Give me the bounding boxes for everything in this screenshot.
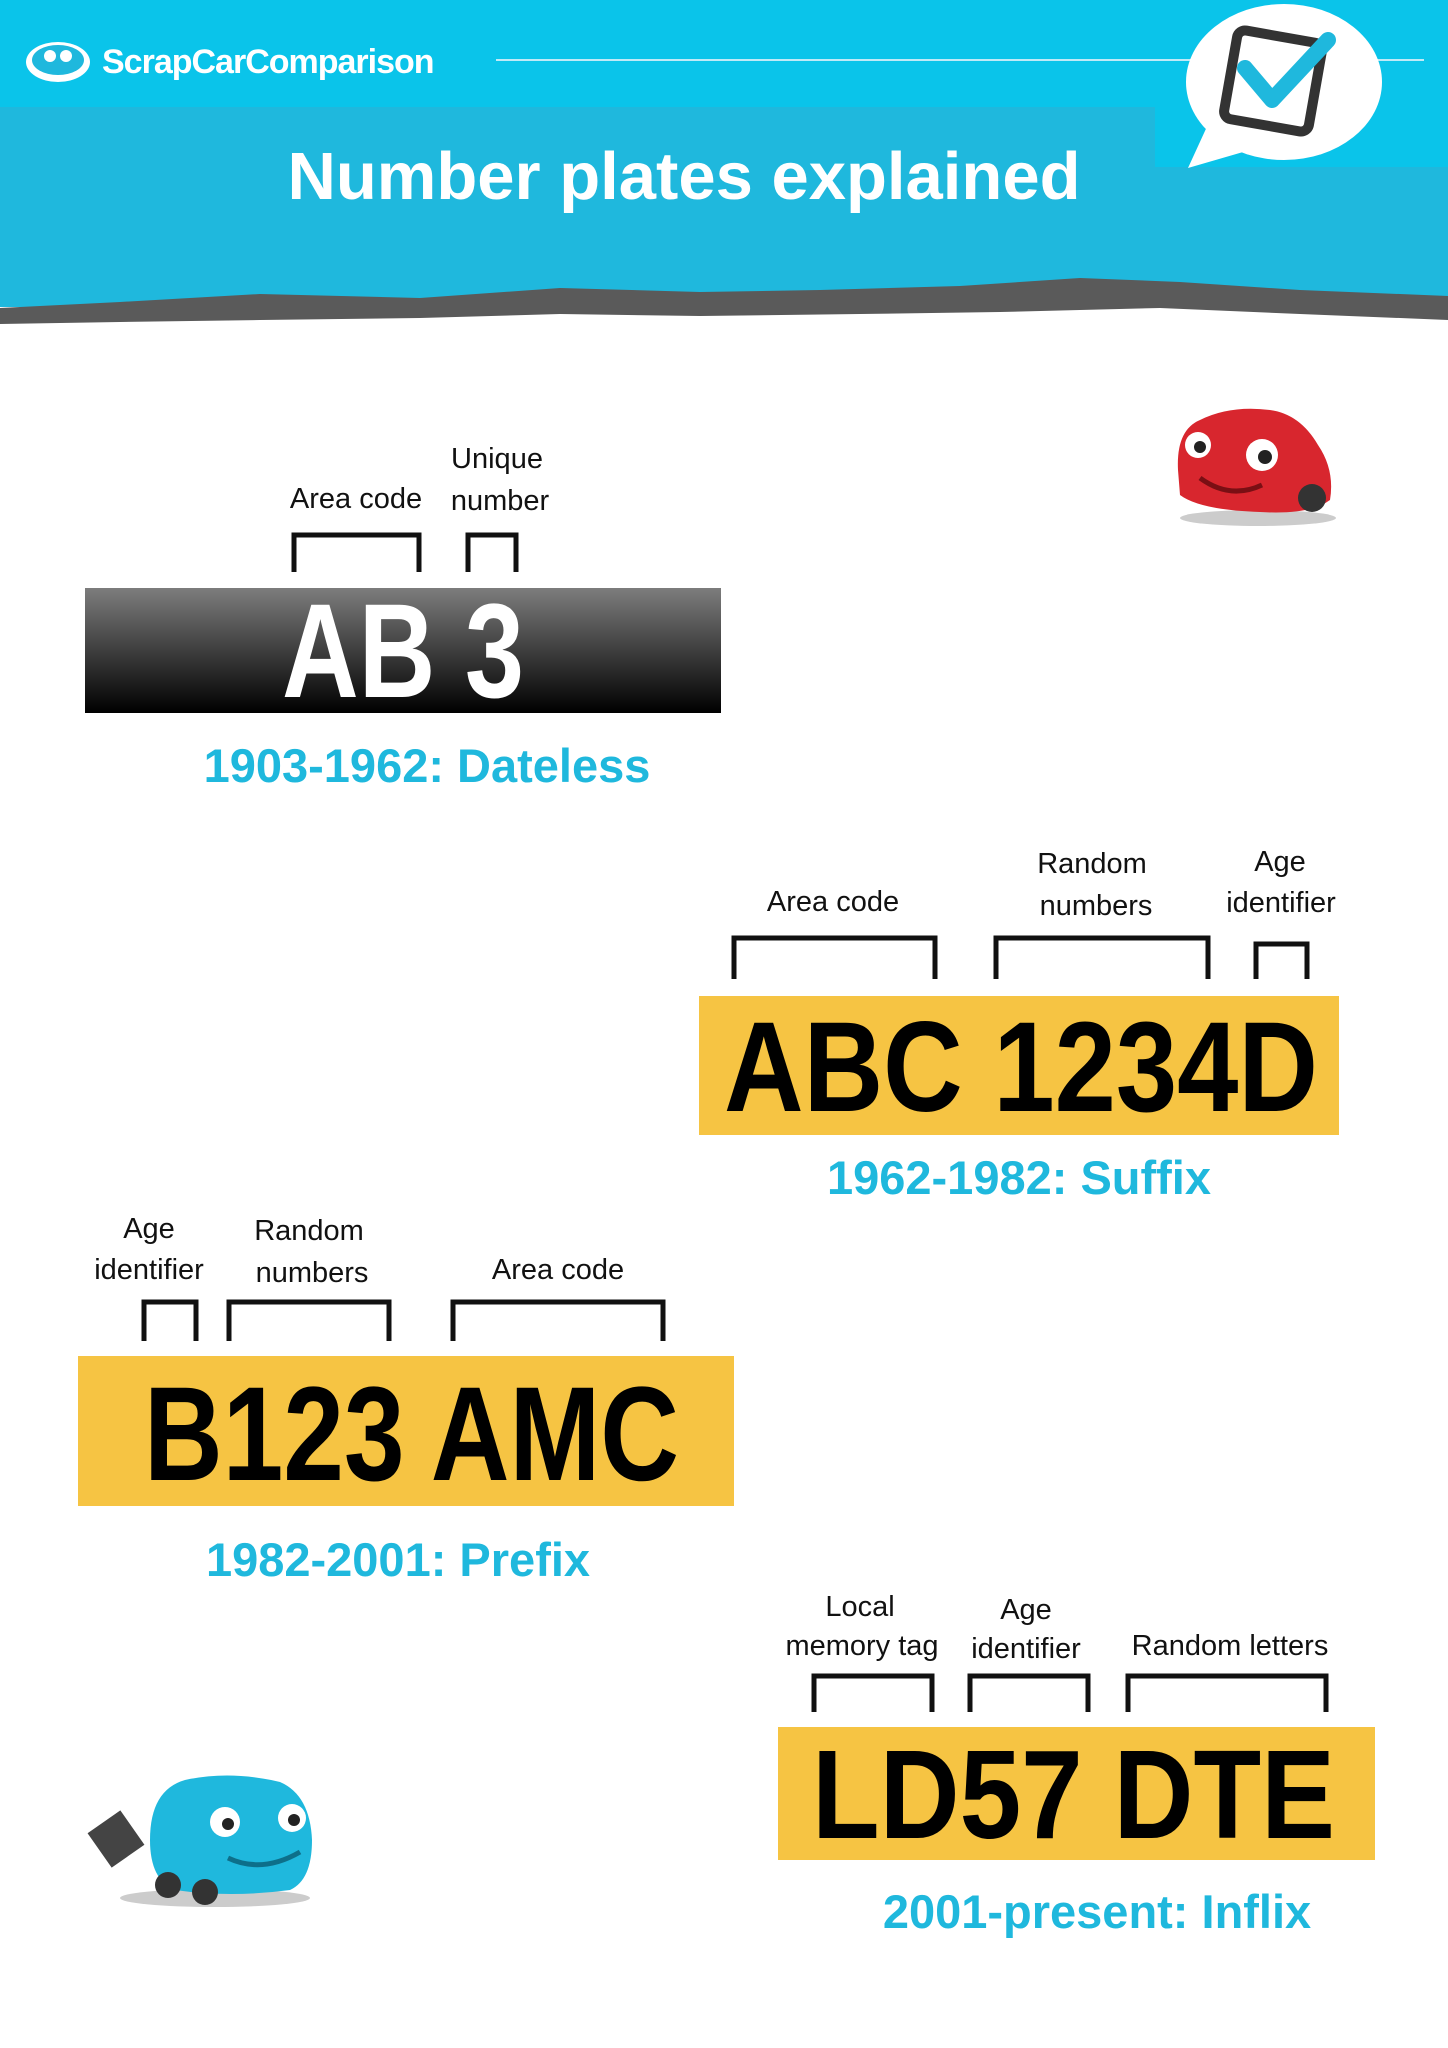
labels inflix: Random letters bbox=[1132, 1630, 1328, 1662]
labels prefix: Area code bbox=[492, 1254, 624, 1286]
labels inflix: Local bbox=[825, 1591, 895, 1623]
labels inflix bbox=[785, 1591, 1328, 1665]
labels suffix bbox=[767, 846, 1336, 922]
header bbox=[0, 0, 1448, 324]
title: Number plates explained bbox=[287, 139, 1081, 214]
caption dateless: 1903-1962: Dateless bbox=[204, 739, 650, 792]
panel: dateless bbox=[85, 443, 721, 792]
labels suffix: identifier bbox=[1226, 887, 1336, 919]
labels suffix: Age bbox=[1254, 846, 1306, 878]
brackets dateless bbox=[294, 535, 516, 572]
caption inflix: 2001-present: Inflix bbox=[883, 1885, 1311, 1938]
plate: AB 3: AB 3 bbox=[282, 577, 524, 726]
icon: red car bbox=[1178, 409, 1336, 526]
labels suffix: numbers bbox=[1040, 890, 1152, 922]
plate: LD57 DTE: LD57 DTE bbox=[812, 1724, 1335, 1865]
panel: inflix bbox=[778, 1591, 1375, 1938]
caption suffix: 1962-1982: Suffix bbox=[827, 1151, 1211, 1204]
labels prefix: Random bbox=[254, 1215, 364, 1247]
plate: ABC 1234D: ABC 1234D bbox=[724, 996, 1318, 1139]
labels dateless: Area code bbox=[290, 483, 422, 515]
logo: ScrapCarComparison bbox=[102, 43, 434, 81]
labels dateless bbox=[290, 443, 550, 517]
labels prefix bbox=[94, 1213, 624, 1289]
brackets prefix bbox=[144, 1302, 663, 1341]
labels inflix: memory tag bbox=[785, 1630, 939, 1662]
plate: B123 AMC: B123 AMC bbox=[144, 1360, 679, 1509]
labels prefix: numbers bbox=[256, 1257, 368, 1289]
plate: AB 3 bbox=[85, 577, 721, 726]
labels prefix: identifier bbox=[94, 1254, 204, 1286]
brackets suffix bbox=[734, 938, 1307, 979]
panel: prefix bbox=[78, 1213, 734, 1586]
labels inflix: Age bbox=[1000, 1594, 1052, 1626]
labels dateless: number bbox=[451, 485, 550, 517]
labels suffix: Area code bbox=[767, 886, 899, 918]
caption prefix: 1982-2001: Prefix bbox=[206, 1533, 590, 1586]
icon: blue car bbox=[88, 1775, 312, 1907]
brackets inflix bbox=[814, 1676, 1326, 1712]
labels prefix: Age bbox=[123, 1213, 175, 1245]
labels inflix: identifier bbox=[971, 1633, 1081, 1665]
labels suffix: Random bbox=[1037, 848, 1147, 880]
labels dateless: Unique bbox=[451, 443, 543, 475]
panel: suffix bbox=[699, 846, 1339, 1204]
icon: speech bubble checkmark bbox=[1186, 4, 1382, 168]
